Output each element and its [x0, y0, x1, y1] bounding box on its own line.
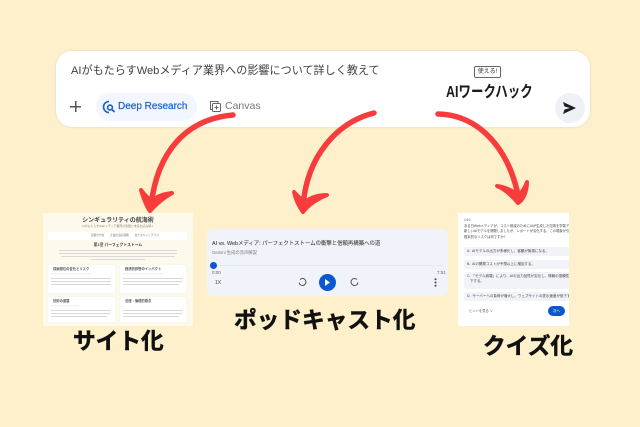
- time end: 7:51: [437, 270, 446, 275]
- site cards: [48, 265, 186, 322]
- panel: podcast player: [207, 229, 448, 296]
- time start: 0:00: [212, 270, 221, 275]
- card 3: [48, 297, 115, 322]
- option A: A. AIモデルの出力が多様化し、客観が無視になる。: [467, 249, 549, 253]
- icon: play: [325, 279, 330, 286]
- card 1: [48, 265, 115, 293]
- logo wordmark: AIワークハック: [446, 84, 533, 100]
- icon: more: [434, 278, 436, 287]
- question text: [464, 224, 569, 239]
- site tabs: [48, 232, 187, 240]
- icon: forward: [350, 278, 358, 286]
- option D: [464, 292, 569, 301]
- site title: シンギュラリティの航海術: [82, 218, 154, 224]
- logo badge: 使える!: [478, 69, 497, 75]
- caption: podcast: ポッドキャスト化: [234, 307, 416, 333]
- prompt text: AIがもたらすWebメディア業界への影響について詳しく教えて: [71, 65, 380, 77]
- canvas label: Canvas: [225, 100, 261, 112]
- option C: [464, 272, 569, 289]
- icon: rewind: [298, 278, 306, 286]
- next button: [548, 306, 565, 316]
- caption: site: サイト化: [73, 328, 164, 354]
- progress knob: [210, 262, 216, 268]
- chapter body lines: [59, 250, 177, 260]
- Deep Research chip: [96, 93, 197, 121]
- prompt card: [56, 51, 590, 127]
- hint label: ヒントを見る ∨: [469, 309, 493, 313]
- card 1: 検索順位の変化とリスク: [53, 267, 89, 271]
- caption: quiz: クイズ化: [483, 333, 573, 359]
- card 2: 経済的影響のインパクト: [125, 267, 161, 271]
- card 4: [120, 297, 186, 322]
- icon: deep research: [102, 100, 115, 114]
- card 4: 法律・倫理的懸念: [125, 299, 151, 303]
- arrow: to quiz: [438, 114, 527, 203]
- icon: plus: [70, 101, 81, 112]
- card 3: 技術の進展: [53, 299, 69, 303]
- card 2: [120, 265, 186, 293]
- next button: 次へ: [553, 309, 560, 313]
- send button: [555, 93, 585, 123]
- speed label: 1X: [215, 280, 221, 286]
- panel: site preview: [43, 213, 193, 326]
- panel: quiz: [458, 213, 569, 326]
- icon: canvas: [210, 101, 221, 112]
- option C: 下する。: [470, 279, 484, 283]
- progress track: [212, 264, 443, 266]
- question text: 根本的なリスクは何ですか?: [464, 235, 505, 239]
- chip label: Deep Research: [118, 101, 187, 112]
- podcast subtitle: Gemini 生成の音声解説: [212, 250, 257, 255]
- question number: 1/10: [464, 218, 470, 222]
- arrow: to podcast: [294, 113, 374, 212]
- icon: send: [563, 102, 576, 114]
- site tab labels: 影響の分析 企業の適応戦略 新たなキャリアパス: [91, 234, 159, 237]
- logo badge: [474, 66, 501, 78]
- arrow: to site: [141, 115, 233, 211]
- logo: AI work hack: [446, 66, 533, 100]
- play button: [319, 274, 336, 291]
- option B: B. AIの開発コストが予想以上に増加する。: [467, 262, 535, 266]
- chapter heading: 第1章 パーフェクトストーム: [94, 242, 142, 246]
- podcast title: AI vs. Webメディア: パーフェクトストームの衝撃と信頼再構築への道: [212, 241, 380, 247]
- site subtitle: AIがもたらすWebメディア業界の影響と未来を読み解く: [82, 224, 154, 228]
- option B: [464, 260, 569, 269]
- option A: [464, 247, 569, 256]
